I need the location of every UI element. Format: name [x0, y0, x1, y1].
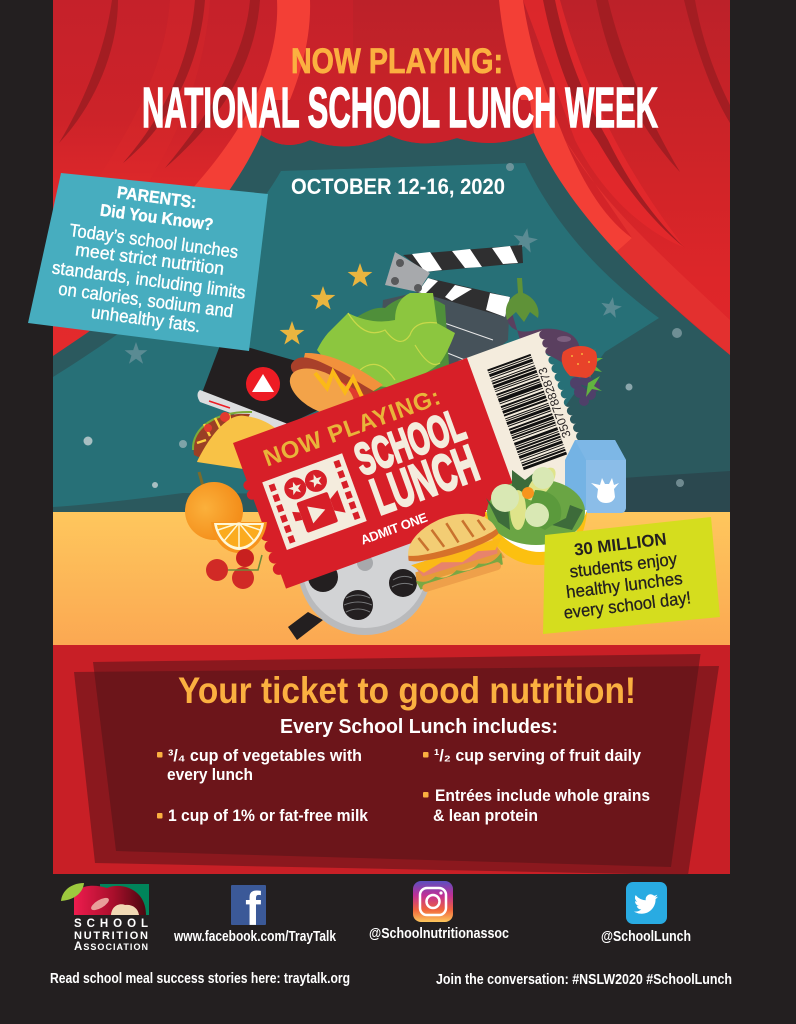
milk carton — [565, 440, 626, 513]
barcode — [509, 362, 546, 463]
darker floor strip — [560, 471, 730, 512]
dark teal stage backdrop — [53, 133, 730, 512]
callout: parents: Today’s school lunches — [68, 220, 239, 262]
left curtain — [53, 0, 353, 400]
footer: hashtags: Join the conversation: #NSLW2020 #SchoolLunch — [436, 971, 732, 988]
logo: school nutrition association: NUTRITION — [74, 930, 148, 942]
footer: stories link: Read school meal success stories here: traytalk.org — [50, 970, 350, 987]
ticket stub — [459, 330, 595, 507]
callout: 30 million — [543, 517, 720, 634]
icon: instagram — [413, 881, 453, 922]
film reel — [288, 501, 432, 640]
icon: facebook: f — [245, 882, 261, 935]
film camera icon — [262, 453, 367, 550]
panel: nutrition — [53, 645, 730, 875]
orange — [185, 472, 243, 540]
orange slice — [211, 522, 267, 553]
nutrition subheading: Every School Lunch includes: — [280, 715, 558, 738]
cherry tomatoes — [206, 549, 262, 589]
eggplant — [506, 278, 580, 368]
instagram handle: @Schoolnutritionassoc — [369, 926, 509, 942]
logo: school nutrition association: SCHOOL — [74, 918, 148, 930]
lighter teal backdrop — [53, 163, 659, 507]
callout: parents: standards, including limits — [51, 257, 247, 303]
callout: parents: on calories, sodium and — [57, 279, 234, 321]
icon: facebook — [231, 882, 266, 935]
ticket now playing: NOW PLAYING: — [260, 383, 444, 472]
gold stars — [280, 263, 372, 345]
ticket school: SCHOOL — [348, 399, 472, 485]
background stars and dots — [84, 163, 684, 488]
clapperboard — [380, 245, 523, 400]
salad bowl — [485, 463, 587, 565]
twitter handle: @SchoolLunch — [601, 929, 691, 945]
stage scene — [53, 0, 730, 645]
taco — [193, 412, 280, 470]
tablet — [198, 340, 340, 431]
list: right column: ¹/₂ cup serving of fruit daily — [434, 746, 641, 765]
ticket admit one: ADMIT ONE — [359, 509, 430, 548]
list: right column: Entrées include whole grains — [435, 786, 650, 805]
callout: 30 million: healthy lunches — [565, 568, 684, 602]
logo: school nutrition association — [61, 883, 149, 953]
list: left column — [157, 746, 368, 825]
callout: 30 million: 30 MILLION — [573, 529, 668, 560]
facebook handle: www.facebook.com/TrayTalk — [173, 929, 337, 945]
callout: parents: meet strict nutrition — [74, 239, 225, 279]
callout: parents: PARENTS: — [116, 183, 198, 212]
date: OCTOBER 12-16, 2020 — [291, 174, 505, 199]
barcode number: 35077882873 — [535, 365, 574, 440]
callout: parents: Did You Know? — [99, 201, 214, 234]
sandwich — [400, 503, 511, 594]
right curtain — [353, 0, 730, 400]
strawberry and blackberry — [562, 346, 603, 406]
callout: parents — [28, 173, 268, 351]
title: now playing: NOW PLAYING: — [291, 42, 503, 81]
list: right column — [423, 746, 650, 825]
logo: school nutrition association: ASSOCIATION — [74, 941, 148, 953]
ticket body — [227, 358, 520, 591]
ticket — [227, 330, 595, 591]
list: left column: 1 cup of 1% or fat-free milk — [168, 806, 368, 825]
callout: 30 million: every school day! — [563, 587, 692, 623]
list: right column: & lean protein — [433, 806, 538, 825]
list: left column: every lunch — [167, 765, 253, 784]
ticket lunch: LUNCH — [364, 435, 486, 527]
floor — [53, 512, 730, 645]
list: left column: ³/₄ cup of vegetables with — [168, 746, 362, 765]
nutrition heading: Your ticket to good nutrition! — [178, 670, 636, 711]
callout: 30 million: students enjoy — [568, 549, 678, 582]
icon: twitter — [626, 882, 667, 924]
lettuce — [317, 293, 455, 400]
callout: parents: unhealthy fats. — [90, 302, 202, 336]
valance scallops — [261, 100, 534, 146]
hot dog — [282, 353, 383, 425]
